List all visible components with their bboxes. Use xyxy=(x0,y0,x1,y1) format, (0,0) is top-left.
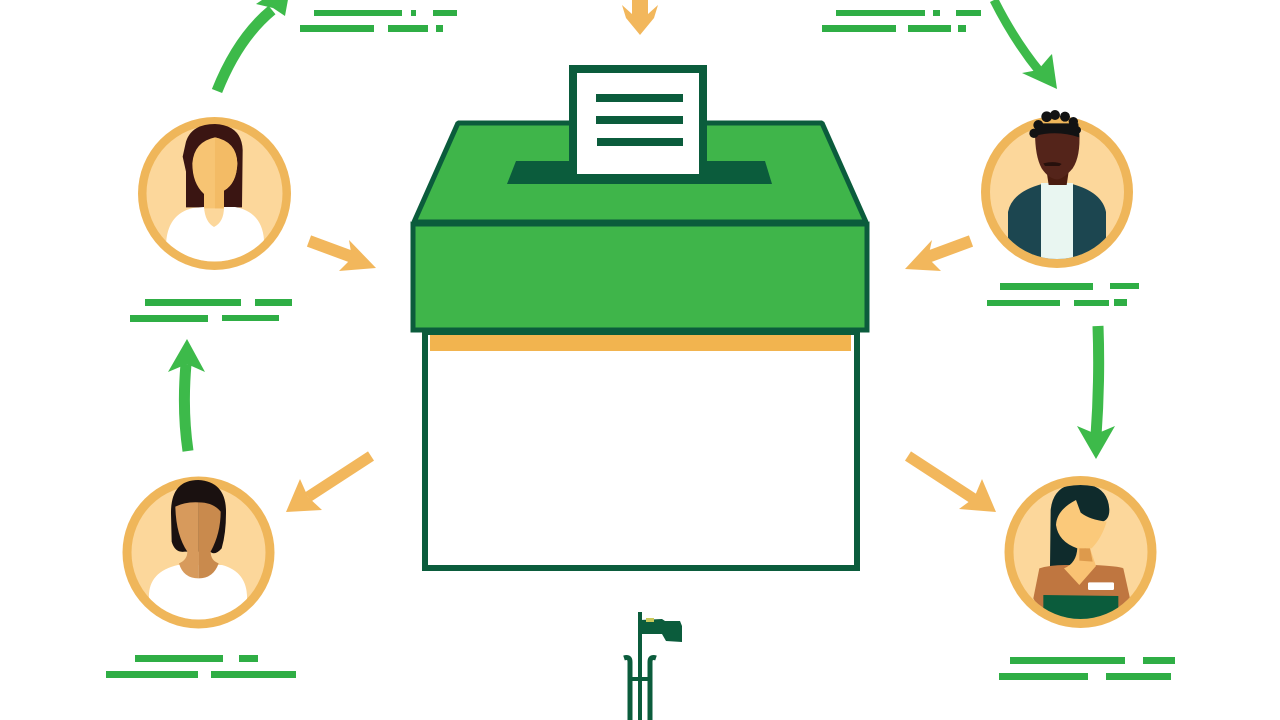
ballot box xyxy=(413,65,867,568)
voter: bottom right woman xyxy=(1004,476,1156,628)
ballot slot xyxy=(507,161,772,184)
label bars: bottom right voter xyxy=(999,657,1175,680)
voter: top right man xyxy=(981,110,1133,270)
voter: bottom left woman xyxy=(122,476,274,630)
arrow: top centre orange xyxy=(622,0,658,35)
arrow: orange box to bottom-right voter xyxy=(908,456,996,512)
arrow: orange box to bottom-left voter xyxy=(286,456,371,512)
arrow: orange top-left voter to box xyxy=(309,240,376,271)
lid top xyxy=(414,123,866,222)
arrow: top right green xyxy=(994,0,1057,89)
arrow: right side green down xyxy=(1077,326,1115,459)
arrow: left side green up xyxy=(168,339,205,451)
label bars: right voter xyxy=(987,283,1139,306)
arrow: top left green xyxy=(217,0,289,91)
label bars: left voter xyxy=(130,299,292,322)
label bars: bottom left voter xyxy=(106,655,296,678)
arrow: orange top-right voter to box xyxy=(905,240,971,271)
lid front xyxy=(413,224,867,330)
box lower body xyxy=(425,332,857,568)
orange strip under lid xyxy=(430,335,851,351)
label bars: top right xyxy=(822,10,981,32)
ballot paper xyxy=(569,65,707,177)
label bars: top left xyxy=(300,10,457,32)
icon: flag and stand xyxy=(624,612,682,720)
voter: top left woman xyxy=(138,117,291,270)
